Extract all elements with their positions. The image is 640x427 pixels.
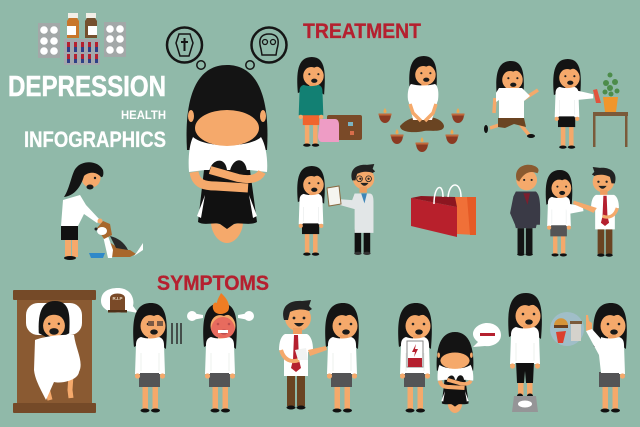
figure: sad woman hugging knees xyxy=(187,65,267,243)
icon: battery xyxy=(407,341,423,367)
figure: woman petting dog xyxy=(61,162,103,260)
icon: shiver lines xyxy=(172,323,181,344)
icon: orange bottle xyxy=(67,13,79,38)
title: INFOGRAPHICS: INFOGRAPHICS xyxy=(24,127,166,152)
figure: woman at doctor xyxy=(297,166,325,256)
icon: junk food circle xyxy=(550,312,584,346)
figure: woman meditating xyxy=(400,56,444,132)
subtitle: HEALTH: HEALTH xyxy=(121,108,166,122)
icon: dog xyxy=(94,221,143,258)
figure: man in white shirt xyxy=(573,167,619,257)
icon: shopping bags xyxy=(411,185,476,237)
icon: steam right xyxy=(238,311,254,321)
icon: table xyxy=(593,112,628,147)
icon: potted plant xyxy=(602,72,620,112)
figure: woman talking with man xyxy=(325,303,359,412)
icon: steam left xyxy=(187,311,203,321)
speech bubble: RIP gravestone xyxy=(101,288,138,313)
icon: right blister pack xyxy=(104,22,126,57)
figure: man consoling woman xyxy=(279,300,327,410)
icon: fire xyxy=(213,293,229,314)
figure: woman in bed xyxy=(13,290,96,413)
figure: woman watering plant xyxy=(553,59,593,149)
thought bubble: skull xyxy=(246,28,286,69)
figure: woman with dark eye bags xyxy=(133,303,167,412)
icon: bathroom scale xyxy=(512,396,538,412)
icon: brown suitcase xyxy=(327,115,362,140)
icon: capsule pack xyxy=(64,39,100,65)
speech bubble: minus xyxy=(473,323,501,347)
figure: woman travelling xyxy=(297,57,325,147)
icon: clipboard xyxy=(327,186,341,206)
title: DEPRESSION: DEPRESSION xyxy=(8,71,166,103)
figure: woman with low battery xyxy=(398,303,432,412)
icon: left blister pack xyxy=(38,23,60,58)
heading: SYMPTOMS: SYMPTOMS xyxy=(157,272,269,295)
illustration: medicines xyxy=(38,13,126,65)
speech bubble: RIP gravestone: R.I.P xyxy=(112,296,123,301)
icon: spray bottle xyxy=(593,89,601,103)
thought bubble: coffin xyxy=(167,28,205,69)
icon: dog bowl xyxy=(89,253,105,258)
heading: TREATMENT: TREATMENT xyxy=(303,20,421,43)
figure: woman being consoled xyxy=(546,170,583,257)
icon: brown bottle xyxy=(85,13,97,38)
figure: businessman xyxy=(510,165,540,256)
icon: candle lamps xyxy=(378,108,464,152)
figure: woman on scale xyxy=(508,293,542,398)
icon: pink suitcase xyxy=(318,119,339,142)
figure: small woman hugging knees xyxy=(437,332,473,413)
figure: woman refusing junk food xyxy=(586,303,627,412)
figure: woman running xyxy=(484,61,538,138)
figure: doctor xyxy=(340,164,375,255)
figure: angry woman xyxy=(203,303,237,412)
